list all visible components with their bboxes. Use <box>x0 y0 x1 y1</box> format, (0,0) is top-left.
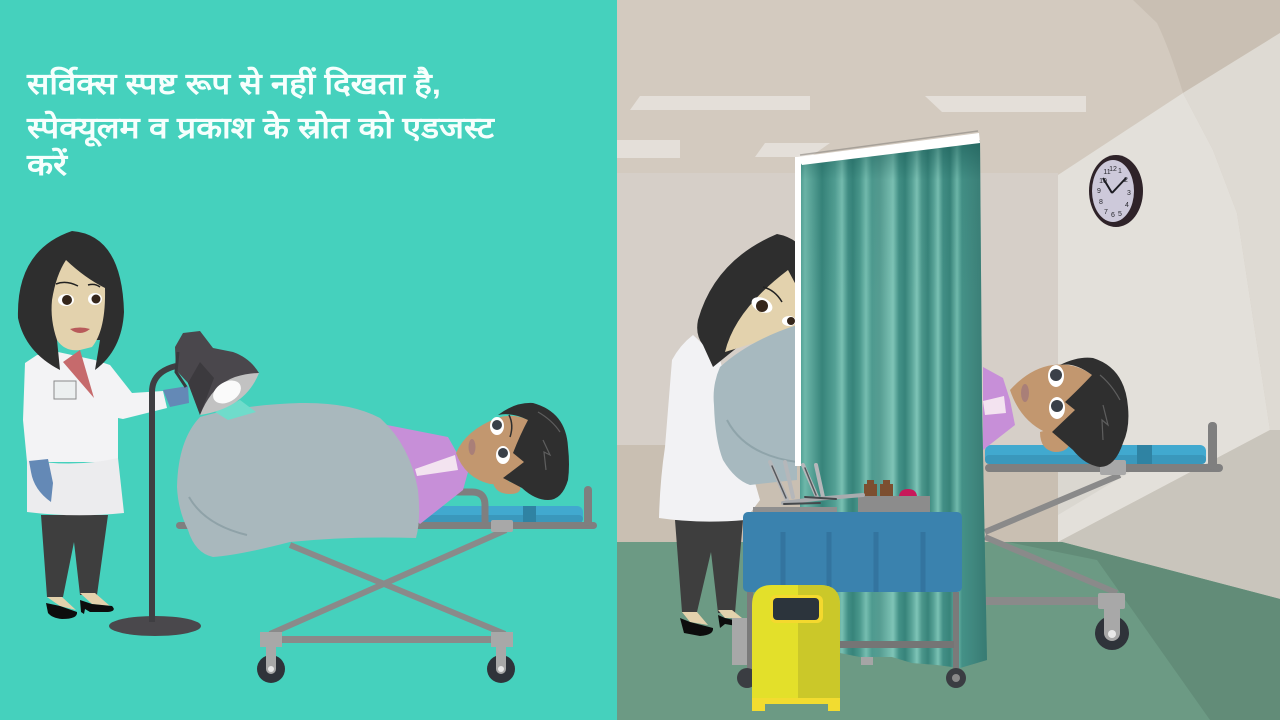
wall clock: 1 <box>1118 168 1122 175</box>
patient: left <box>387 403 569 524</box>
wall clock: 7 <box>1104 209 1108 216</box>
wall clock: 3 <box>1127 190 1131 197</box>
patient: right <box>983 358 1128 467</box>
doctor shoes right <box>680 615 742 636</box>
speculum instruments <box>770 462 863 504</box>
heading: instruction text: करें <box>26 147 69 182</box>
wall clock: 8 <box>1099 199 1103 206</box>
instrument trolley <box>732 480 966 688</box>
heading: instruction text: सर्विक्स स्पष्ट रूप से नहीं दिखता है, <box>26 66 441 101</box>
wall clock: 11 <box>1103 169 1111 176</box>
doctor coat <box>23 350 189 515</box>
wall clock: 10 <box>1099 178 1107 185</box>
wall clock: 5 <box>1118 211 1122 218</box>
doctor head right <box>697 234 796 367</box>
wall clock: 4 <box>1125 202 1129 209</box>
doctor legs right <box>675 520 743 613</box>
doctor legs <box>41 515 114 619</box>
panel: left teal background <box>0 0 617 720</box>
wall clock: 6 <box>1111 212 1115 219</box>
privacy curtain <box>795 131 987 668</box>
drape: left grey sheet <box>177 403 419 557</box>
wall clock: 9 <box>1097 188 1101 195</box>
doctor head <box>18 231 124 370</box>
wall clock <box>1089 155 1143 227</box>
stretcher: right <box>985 422 1223 650</box>
doctor feet right <box>682 610 742 625</box>
stretcher: left <box>176 486 597 683</box>
doctor: right <box>659 234 796 636</box>
heading: instruction text <box>26 66 496 182</box>
heading: instruction text: स्पेक्यूलम व प्रकाश के स्रोत को एडजस्ट <box>26 110 496 147</box>
floor lamp <box>109 331 259 636</box>
doctor coat right <box>659 335 760 522</box>
yellow waste bin <box>752 585 840 711</box>
drape: right grey sheet <box>714 325 797 485</box>
wall clock: 2 <box>1124 177 1128 184</box>
wall clock: 12 <box>1109 166 1117 173</box>
panel: right room background <box>617 0 1280 720</box>
doctor: left <box>18 231 189 619</box>
